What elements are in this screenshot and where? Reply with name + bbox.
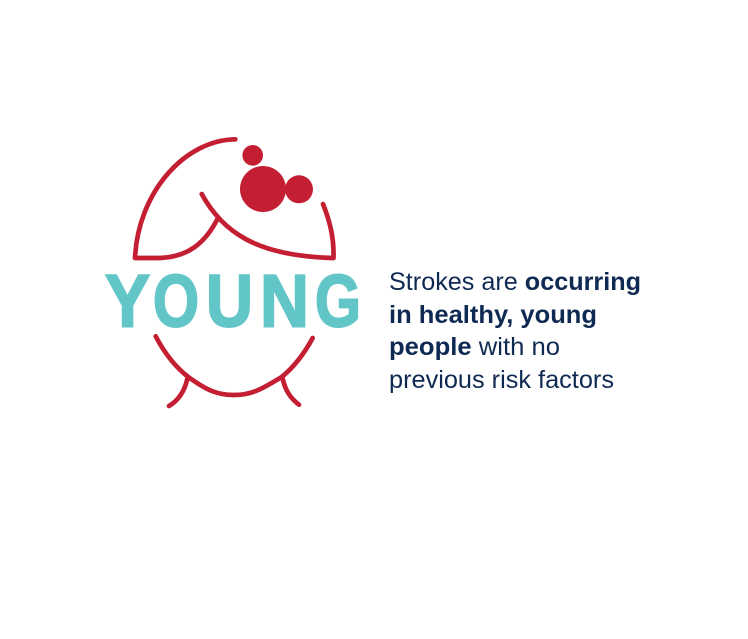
right neck line [282, 377, 299, 405]
heading: YOUNG: O [153, 260, 199, 342]
text block: description: Strokes are occurring [389, 268, 641, 296]
jaw curve [156, 336, 313, 395]
heading: YOUNG: U [206, 260, 253, 342]
text block: description [389, 268, 641, 394]
right brain hemisphere outline [202, 194, 334, 258]
text block: description: in healthy, young [389, 301, 597, 329]
icon: blood clot circles [240, 145, 313, 212]
heading: YOUNG: G [315, 260, 361, 342]
left neck line [169, 377, 188, 406]
text block: description: previous risk factors [389, 366, 614, 394]
left brain hemisphere outline [135, 139, 235, 258]
text block: description: people with no [389, 333, 560, 361]
heading: YOUNG: Y [105, 260, 150, 342]
heading: YOUNG [105, 260, 361, 342]
icon: head and brain outline with stroke clot [135, 139, 334, 406]
heading: YOUNG: N [260, 260, 309, 342]
